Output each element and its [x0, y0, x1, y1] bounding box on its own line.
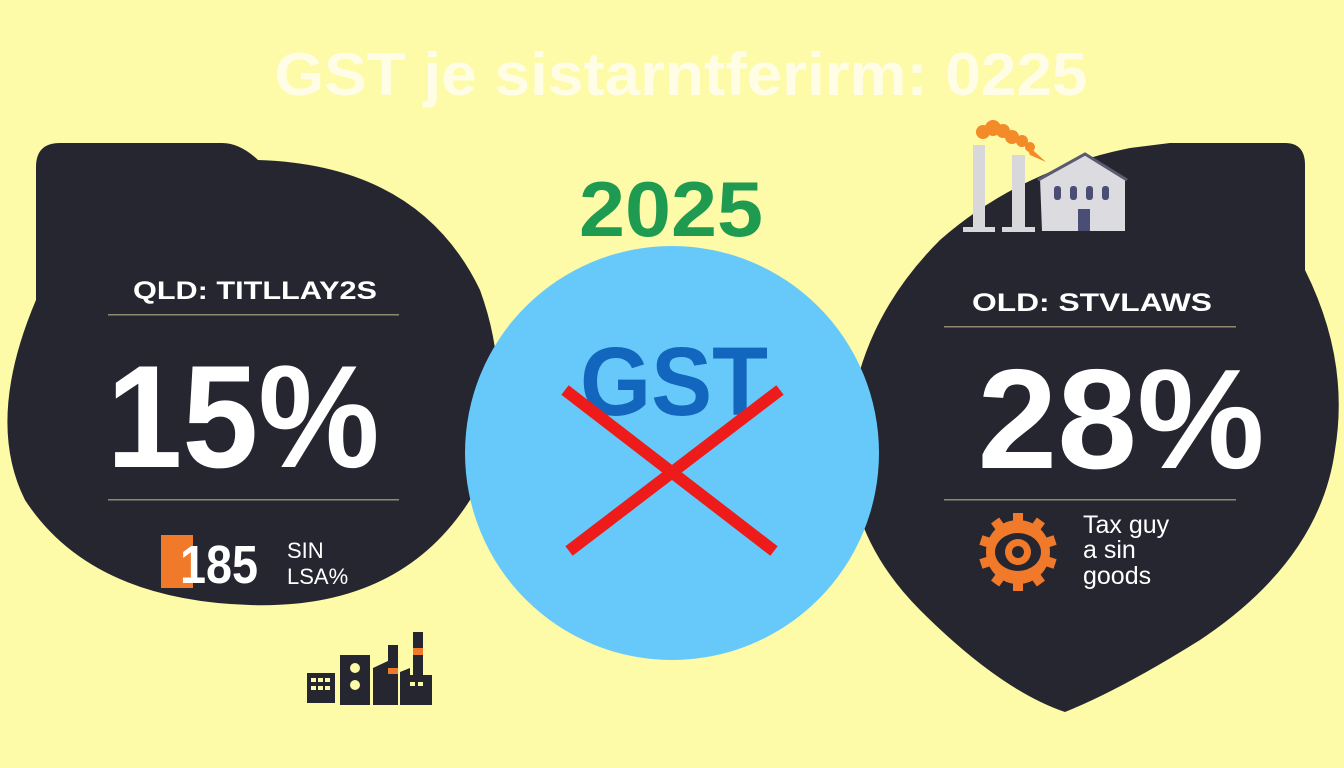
right heading: OLD: STVLAWS	[972, 289, 1212, 317]
title: GST je sistarntferirm: 0225	[274, 41, 1088, 108]
center circle	[465, 246, 879, 660]
left stat row	[161, 535, 348, 595]
right text: goods	[1083, 562, 1151, 590]
right big number: 28%	[978, 340, 1264, 499]
left heading: QLD: TITLLAY2S	[133, 277, 377, 305]
icon: factory top	[963, 120, 1127, 232]
right text	[1083, 511, 1170, 590]
left big number: 15%	[106, 335, 380, 498]
left stat row: LSA%	[287, 564, 348, 589]
icon: factory bottom	[307, 632, 432, 705]
red cross	[565, 390, 780, 551]
right text: a sin	[1083, 536, 1136, 564]
right text: Tax guy	[1083, 511, 1170, 539]
left stat row: SIN	[287, 538, 324, 563]
panel: right blob	[848, 143, 1339, 712]
panel: left blob	[7, 143, 498, 605]
year label: 2025	[579, 165, 763, 253]
icon: gear	[979, 513, 1057, 591]
left stat row: 185	[180, 535, 258, 595]
GST label: GST	[580, 327, 768, 436]
